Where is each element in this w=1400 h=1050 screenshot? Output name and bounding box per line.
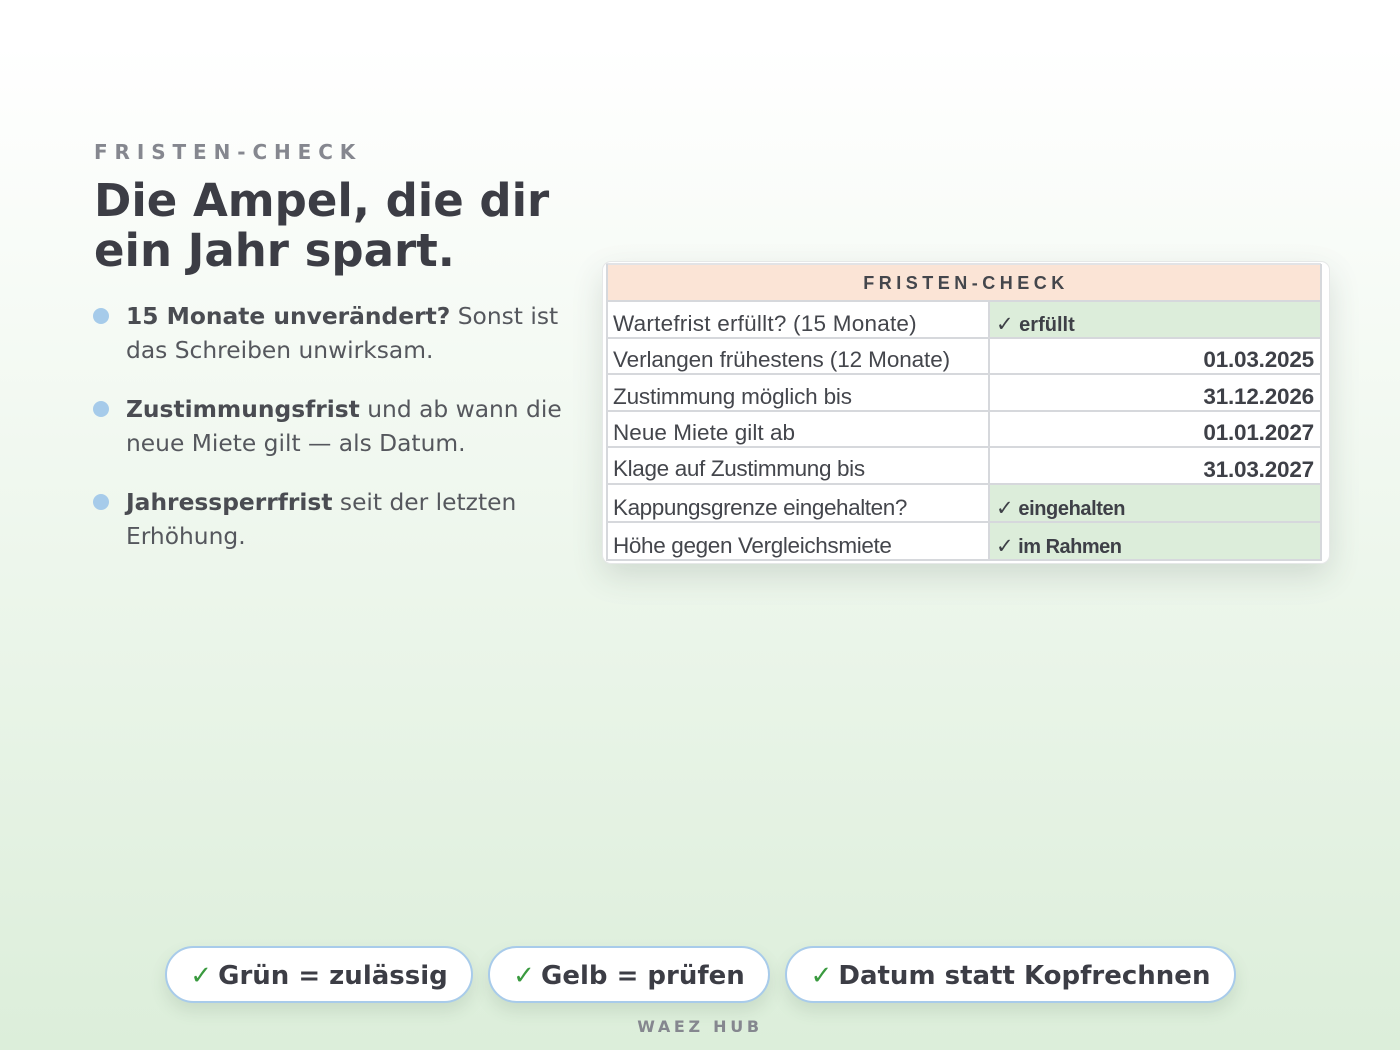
- bullet 3: [93, 488, 516, 550]
- row value: lawsuit until: 31.03.2027: [1203, 457, 1314, 482]
- pill: date: ✓ Datum statt Kopfrechnen: [811, 961, 1210, 991]
- bullet 2: neue Miete gilt — als Datum.: [126, 429, 466, 457]
- bullet 2: [93, 395, 562, 457]
- row label: new rent from: Neue Miete gilt ab: [613, 420, 795, 445]
- pill: date: [785, 946, 1236, 1003]
- footer brand: WAEZ HUB: [637, 1017, 763, 1036]
- pill: yellow: ✓ Gelb = prüfen: [513, 961, 745, 991]
- row label: consent until: Zustimmung möglich bis: [613, 384, 852, 409]
- row label: cap limit: Kappungsgrenze eingehalten?: [613, 495, 907, 520]
- row value: earliest request: 01.03.2025: [1203, 347, 1314, 372]
- bullet 1: [93, 302, 558, 364]
- row label: lawsuit until: Klage auf Zustimmung bis: [613, 456, 865, 481]
- row value: waiting period: ✓ erfüllt: [996, 312, 1075, 336]
- row value: cap limit: ✓ eingehalten: [996, 496, 1125, 520]
- row value: new rent from: 01.01.2027: [1203, 420, 1314, 445]
- row label: waiting period: Wartefrist erfüllt? (15 Monate): [613, 311, 917, 336]
- bullet 1: 15 Monate unverändert? Sonst ist: [126, 302, 558, 330]
- row value: comparable rent: ✓ im Rahmen: [996, 534, 1121, 558]
- title: Die Ampel, die dir: [94, 174, 549, 227]
- row value: consent until: 31.12.2026: [1203, 384, 1314, 409]
- bullet 2: Zustimmungsfrist und ab wann die: [126, 395, 562, 423]
- title: [94, 174, 550, 276]
- bullet 3: Erhöhung.: [126, 522, 246, 550]
- row label: comparable rent: Höhe gegen Vergleichsmiete: [613, 533, 892, 558]
- bullet 3: Jahressperrfrist seit der letzten: [126, 488, 516, 516]
- eyebrow label: FRISTEN-CHECK: [94, 140, 362, 164]
- pill: green: ✓ Grün = zulässig: [190, 961, 448, 991]
- pill: green: [165, 946, 473, 1003]
- table header: [607, 265, 1321, 301]
- table header: FRISTEN-CHECK: [863, 273, 1069, 293]
- pill: yellow: [488, 946, 770, 1003]
- bullet 1: das Schreiben unwirksam.: [126, 336, 433, 364]
- bullet list: [93, 302, 562, 550]
- panel: deadline check table: [603, 262, 1329, 563]
- title: ein Jahr spart.: [94, 224, 455, 276]
- row label: earliest request: Verlangen frühestens (12 Monate): [613, 347, 950, 372]
